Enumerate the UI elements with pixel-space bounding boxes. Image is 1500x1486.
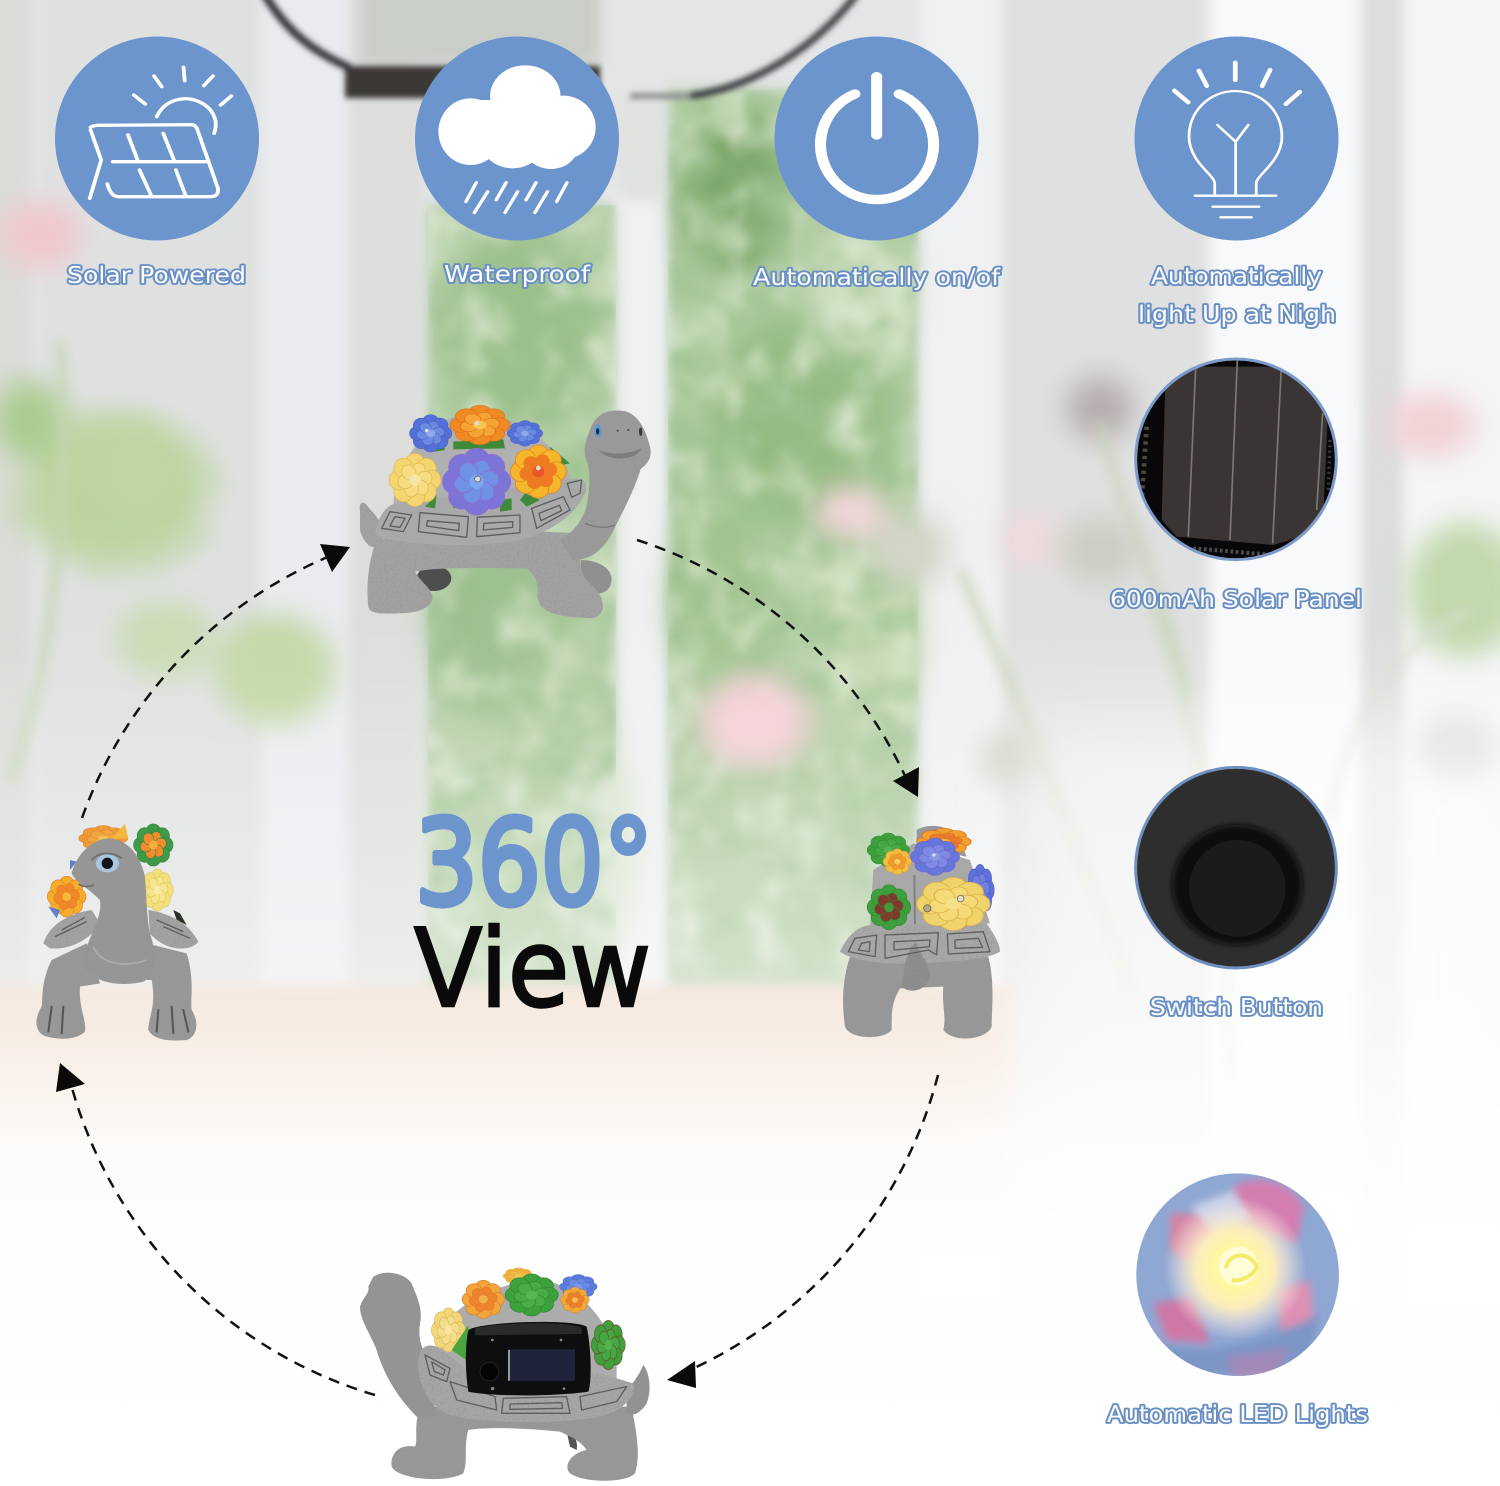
arrow: bottom to left [56, 1063, 375, 1395]
label: Automatically light Up at Nigh: light Up at Nigh [1138, 302, 1336, 328]
feature: automatic on/off [753, 36, 1001, 291]
icon badge: rain cloud [415, 36, 619, 240]
turtle: front view (left) [36, 824, 198, 1041]
label: Waterproof: Waterproof [444, 262, 591, 288]
label: 600mAh Solar Panel: 600mAh Solar Panel [1110, 587, 1362, 613]
label: Automatic LED Lights: Automatic LED Lights [1107, 1402, 1368, 1428]
label: Automatically on/of: Automatically on/of [753, 265, 1001, 291]
arrow: left to top [82, 544, 350, 818]
icon badge: light bulb [1134, 36, 1338, 240]
photo circle: solar panel close-up [1136, 359, 1336, 560]
feature: waterproof [415, 36, 619, 288]
label: Solar Powered: Solar Powered [67, 263, 246, 289]
feature: solar panel [1110, 359, 1362, 613]
label: Automatically light Up at Nigh [1138, 264, 1336, 328]
turtle: side view (top) [360, 405, 651, 618]
feature: switch button [1136, 767, 1336, 1021]
heading: 360 degree view [414, 794, 653, 1032]
label: Automatically light Up at Nigh: Automatically [1151, 264, 1322, 290]
turtle: back view with solar panel (bottom) [360, 1268, 650, 1481]
icon badge: solar panel and sun [55, 36, 259, 240]
turtle: rear view (right) [840, 826, 1000, 1038]
feature: light up at night [1134, 36, 1338, 328]
arrow: right to bottom [667, 1075, 938, 1388]
photo circle: switch button close-up [1136, 767, 1336, 968]
arrow: top to right [637, 540, 919, 797]
heading: 360 degree view: View [414, 907, 651, 1032]
heading: 360 degree view: 360° [415, 794, 653, 932]
label: Switch Button: Switch Button [1150, 995, 1323, 1021]
photo circle: glowing succulent [1136, 1173, 1339, 1377]
feature: LED lights [1107, 1173, 1368, 1428]
feature: solar powered [55, 36, 259, 289]
icon badge: power symbol [774, 36, 978, 240]
